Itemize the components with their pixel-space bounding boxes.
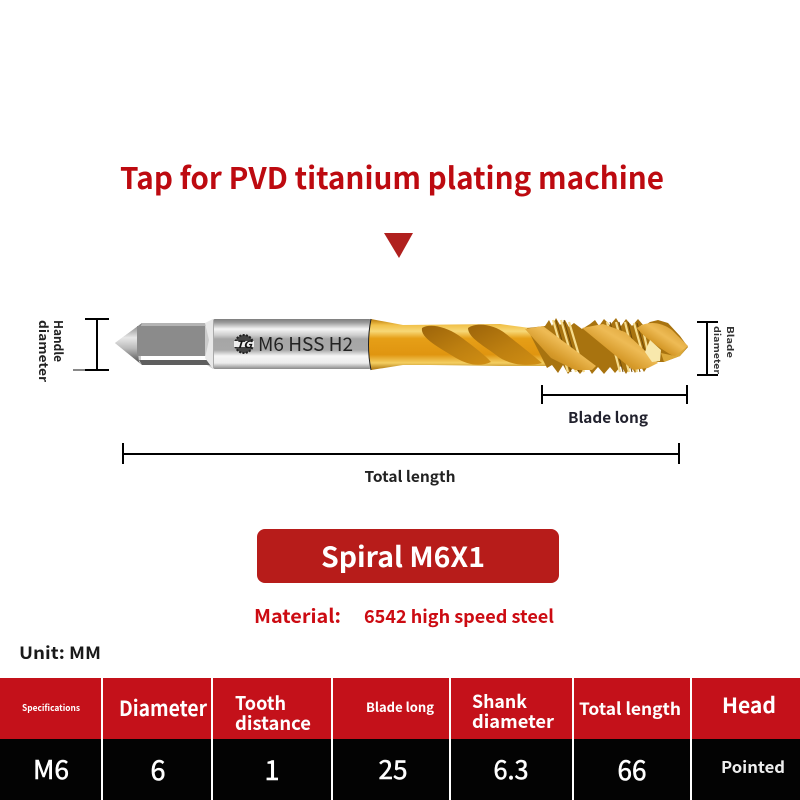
material line: 6542 high speed steel [364,603,554,629]
model badge [257,529,559,583]
unit label: Unit: MM [19,639,101,664]
table value row: 1 [264,749,280,788]
tap tool illustration [115,318,688,374]
material line: Material: [254,602,341,629]
table value row [0,739,800,800]
dimension: blade long [542,385,687,428]
table header row [0,678,800,739]
table header row: Specifications [22,701,80,714]
table value row: 6.3 [494,750,528,787]
icon: brand gear logo [234,335,254,353]
title: Tap for PVD titanium plating machine [120,154,664,198]
material line [254,602,554,629]
dimension: blade diameter [697,322,737,375]
model badge: Spiral M6X1 [321,536,485,576]
shank square end [115,319,213,369]
label: blade diameter: Blade [724,326,737,358]
dimension: handle diameter [35,319,109,383]
table header row: diameter [472,708,554,734]
table header row: Shank [472,688,527,714]
table value row: 66 [618,749,646,788]
table header row: Tooth [235,689,286,716]
dimension: total length [123,443,679,487]
table header row: Blade long [366,697,434,716]
icon: brand gear logo: TG [236,336,254,351]
table header row: Total length [579,695,681,720]
label: total length: Total length [364,466,456,487]
silver shank with marking [213,319,371,369]
dimension: handle diameter: diameter [35,320,52,383]
gold neck [368,319,548,370]
threaded blade [525,318,688,374]
table value row: Pointed [721,754,785,778]
specification table [0,678,800,800]
dimension: blade diameter: diameter [711,326,724,374]
table header row: distance [235,709,311,736]
marking text: M6 HSS H2 [258,330,353,357]
table value row: 6 [150,749,166,788]
table header row: Diameter [119,693,208,723]
table value row: 25 [378,750,408,787]
label: handle diameter: Handle [50,320,67,362]
table header row: Head [722,690,776,720]
table value row: M6 [33,750,69,787]
icon: down arrow [384,233,413,258]
label: blade long: Blade long [568,407,648,428]
